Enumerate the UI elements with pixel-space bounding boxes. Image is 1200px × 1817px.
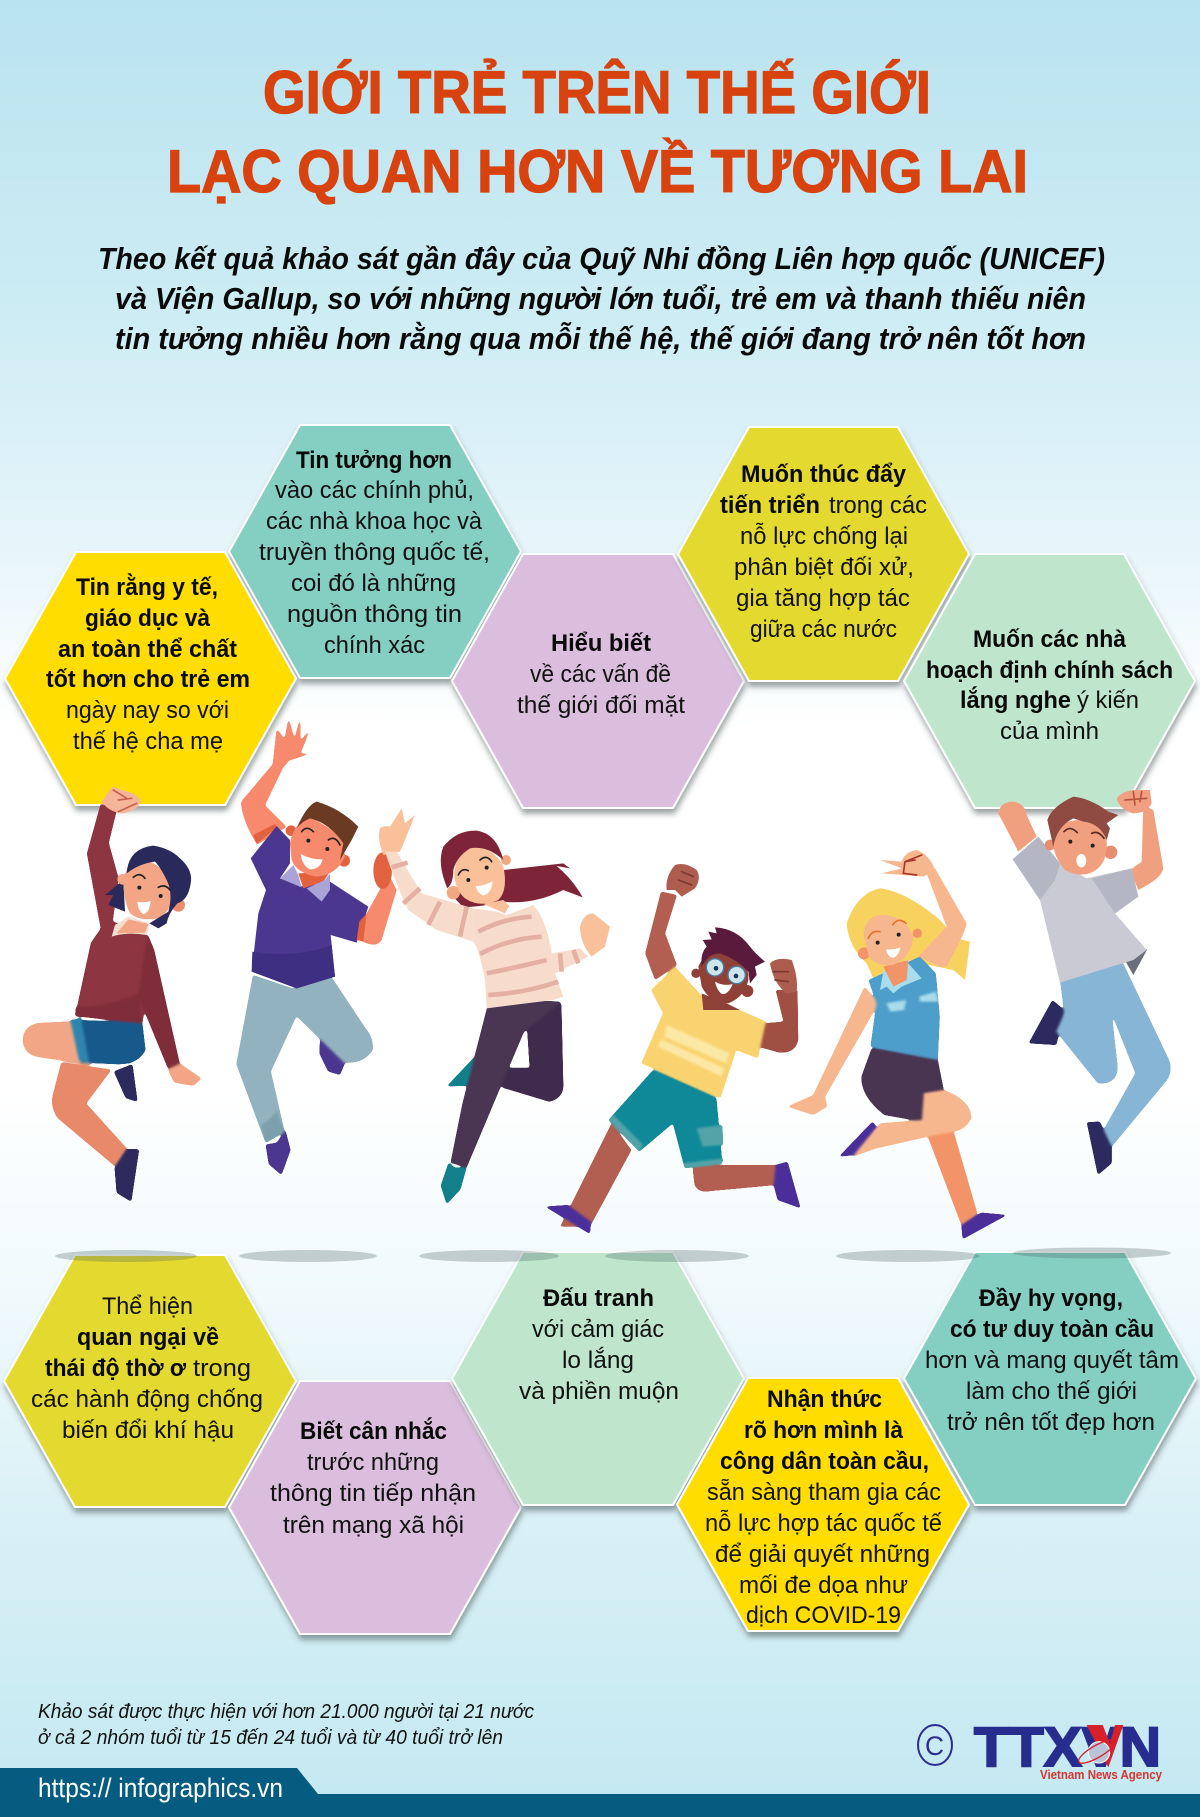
title — [167, 59, 1028, 205]
hexagon: health and education: ngày nay so với — [66, 697, 229, 724]
footer bar with url — [0, 1768, 1200, 1817]
hexagon: struggling with anxiety: và phiền muộn — [519, 1378, 679, 1405]
hexagon: push for progress: tiến triển — [720, 492, 820, 519]
hexagon: policymakers listen: của mình — [1000, 718, 1099, 745]
hexagon: global citizens: mối đe dọa như — [739, 1572, 908, 1599]
person: boy with glasses — [545, 864, 801, 1234]
hexagon: climate concern: quan ngại về — [77, 1324, 219, 1351]
hexagon: push for progress — [678, 427, 969, 681]
hexagon: trust: chính xác — [324, 632, 425, 659]
hexagon: global citizens: công dân toàn cầu, — [720, 1448, 929, 1475]
title: LẠC QUAN HƠN VỀ TƯƠNG LAI — [167, 138, 1028, 205]
hexagon: policymakers listen — [904, 554, 1195, 808]
hexagon: push for progress: giữa các nước — [750, 616, 897, 643]
logo: TTXVN Vietnam News Agency: Vietnam News Agency — [1040, 1767, 1163, 1782]
hexagon: struggling with anxiety — [452, 1252, 744, 1505]
hexagon: struggling with anxiety: với cảm giác — [532, 1316, 664, 1343]
hexagon: weighing social media: thông tin tiếp nhận — [270, 1480, 476, 1507]
logo: TTXVN Vietnam News Agency: C — [925, 1731, 944, 1761]
intro text — [98, 241, 1105, 356]
title: GIỚI TRẺ TRÊN THẾ GIỚI — [263, 59, 931, 126]
hexagon: understanding — [452, 554, 744, 808]
hexagon: policymakers listen: ý kiến — [1077, 687, 1139, 714]
hexagon: climate concern: thái độ thờ ơ — [45, 1355, 187, 1382]
footnote: Khảo sát được thực hiện với hơn 21.000 người tại 21 nước — [38, 1701, 534, 1723]
hexagon: global citizens: rõ hơn mình là — [744, 1417, 903, 1444]
hexagon: health and education: tốt hơn cho trẻ em — [46, 666, 250, 693]
logo: TTXVN Vietnam News Agency: TTXVN — [974, 1715, 1161, 1778]
hexagon: health and education: thế hệ cha mẹ — [73, 728, 223, 755]
hexagon: weighing social media — [229, 1381, 521, 1634]
hexagon: trust: nguồn thông tin — [287, 601, 462, 628]
hexagon: climate concern — [4, 1255, 296, 1507]
hexagon: global citizens — [677, 1378, 969, 1631]
hexagon: global citizens: Nhận thức — [767, 1386, 882, 1413]
person: girl in maroon sweater — [23, 787, 202, 1202]
hexagon: trust: coi đó là những — [291, 570, 456, 597]
ground shadows — [55, 1248, 1171, 1262]
hexagon: push for progress: Muốn thúc đẩy — [741, 461, 906, 488]
person: blonde girl in blue vest — [788, 850, 1007, 1239]
hexagon: policymakers listen: hoạch định chính sách — [926, 657, 1173, 684]
hexagon: climate concern: biến đổi khí hậu — [62, 1417, 234, 1444]
hexagon: health and education — [5, 552, 296, 805]
hexagon: struggling with anxiety: lo lắng — [562, 1347, 634, 1374]
hexagon: trust: Tin tưởng hơn — [296, 447, 452, 474]
hexagon: trust: truyền thông quốc tế, — [259, 539, 490, 566]
hexagon: understanding: về các vấn đề — [530, 661, 671, 688]
hexagon: weighing social media: trước những — [307, 1449, 439, 1476]
hexagon: hopeful global mindset: có tư duy toàn cầu — [950, 1316, 1154, 1343]
hexagon: hopeful global mindset: Đầy hy vọng, — [979, 1285, 1123, 1312]
hexagon: trust — [229, 425, 521, 678]
hexagon: climate concern: trong — [193, 1355, 251, 1382]
hexagon: hopeful global mindset: hơn và mang quyết tâm — [925, 1347, 1179, 1374]
footnote — [38, 1701, 534, 1749]
intro text: và Viện Gallup, so với những người lớn tuổi, trẻ em và thanh thiếu niên — [115, 281, 1086, 316]
hexagon: push for progress: trong các — [829, 492, 927, 519]
intro text: Theo kết quả khảo sát gần đây của Quỹ Nhi đồng Liên hợp quốc (UNICEF) — [98, 241, 1105, 276]
hexagon: trust: các nhà khoa học và — [266, 508, 482, 535]
hexagon: hopeful global mindset: trở nên tốt đẹp hơn — [947, 1409, 1155, 1436]
hexagon: push for progress: gia tăng hợp tác — [736, 585, 910, 612]
person: boy in grey t-shirt — [998, 790, 1171, 1175]
hexagon: health and education: Tin rằng y tế, — [76, 573, 218, 601]
hexagon: global citizens: sẵn sàng tham gia các — [707, 1478, 941, 1506]
hexagon: health and education: an toàn thể chất — [58, 636, 237, 663]
hexagon: struggling with anxiety: Đấu tranh — [543, 1285, 654, 1312]
hexagon: climate concern: các hành động chống — [31, 1386, 263, 1413]
intro text: tin tưởng nhiều hơn rằng qua mỗi thế hệ, thế giới đang trở nên tốt hơn — [115, 320, 1086, 356]
hexagon: hopeful global mindset: làm cho thế giới — [966, 1378, 1137, 1405]
hexagon: climate concern: Thể hiện — [102, 1293, 193, 1320]
hexagon: policymakers listen: Muốn các nhà — [973, 626, 1126, 653]
person: girl in striped sweater — [379, 808, 610, 1204]
person: boy in purple polo — [236, 716, 397, 1175]
footnote: ở cả 2 nhóm tuổi từ 15 đến 24 tuổi và từ 40 tuổi trở lên — [38, 1727, 503, 1749]
hexagon: weighing social media: Biết cân nhắc — [300, 1417, 447, 1445]
hexagon: understanding: Hiểu biết — [551, 630, 651, 657]
hexagon: policymakers listen: lắng nghe — [960, 686, 1071, 714]
hexagon: push for progress: phân biệt đối xử, — [734, 554, 914, 581]
hexagon: understanding: thế giới đối mặt — [517, 692, 685, 719]
hexagon: hopeful global mindset — [904, 1252, 1196, 1505]
hexagon: weighing social media: trên mạng xã hội — [283, 1512, 464, 1539]
hexagon: global citizens: nỗ lực hợp tác quốc tế — [705, 1510, 942, 1537]
footer bar with url: https:// infographics.vn — [38, 1773, 283, 1803]
hexagon: trust: vào các chính phủ, — [275, 477, 474, 504]
hexagon: global citizens: để giải quyết những — [715, 1541, 930, 1568]
hexagon: push for progress: nỗ lực chống lại — [740, 523, 908, 550]
hexagon: health and education: giáo dục và — [85, 605, 210, 632]
hexagon: global citizens: dịch COVID-19 — [746, 1602, 901, 1629]
